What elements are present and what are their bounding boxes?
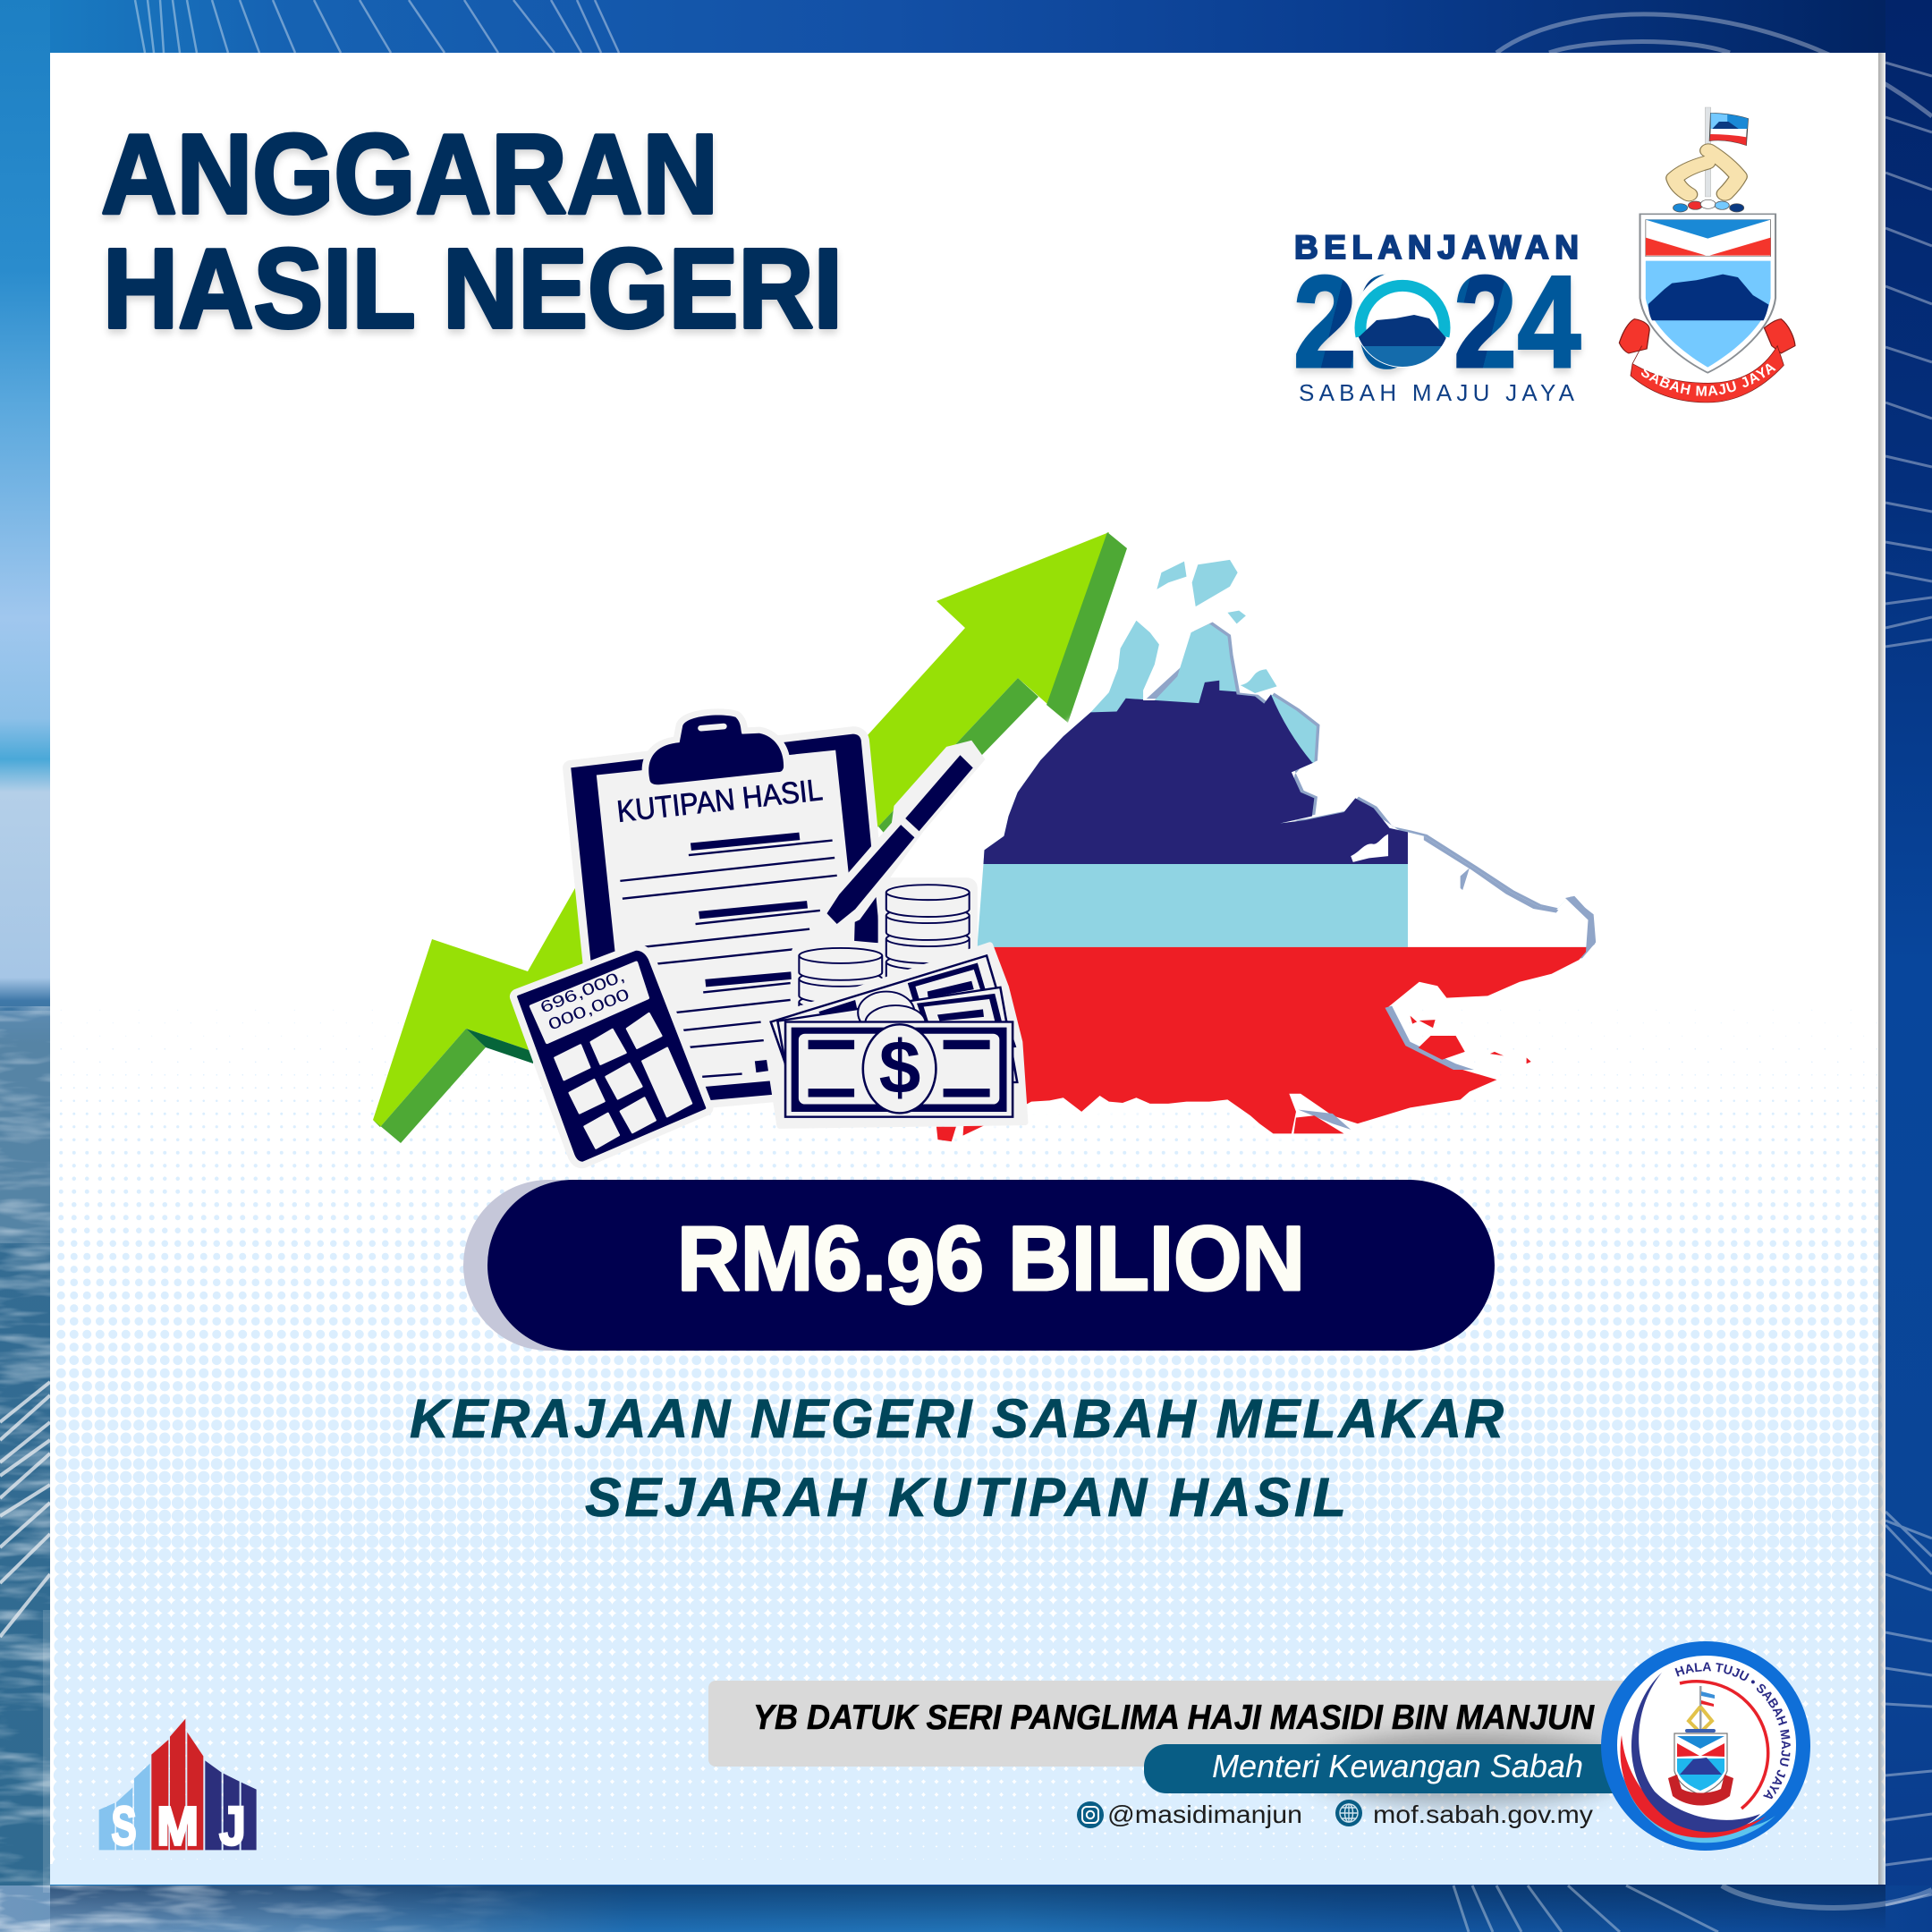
crest: Sabah coat of arms: [1619, 107, 1796, 402]
social links: [1077, 1800, 1593, 1828]
badge ring: [1601, 1641, 1810, 1851]
calculator display: 696,000,: [538, 967, 627, 1017]
subtitle: KERAJAAN NEGERI SABAH MELAKAR: [410, 1388, 1504, 1449]
clipboard: [571, 716, 887, 1110]
map north-east island: [1351, 835, 1388, 862]
logo: SMJ: [99, 1719, 257, 1858]
clipboard clip: [648, 716, 784, 784]
illustration: clipboard, pen, coins, calculator, money: [519, 716, 1025, 1160]
money dollar sign: $: [879, 1025, 920, 1109]
pen: [818, 741, 986, 930]
arrow head side: [1046, 532, 1127, 723]
website: mof.sabah.gov.my: [1373, 1801, 1593, 1828]
title: ANGGARAN: [101, 111, 718, 237]
map flag bands: [962, 621, 1589, 1136]
map northern islands: [1157, 560, 1277, 693]
arrow tail shade: [466, 1029, 534, 1063]
panel edge shading: [1878, 53, 1885, 1885]
clipboard written lines: [620, 836, 837, 1077]
subtitle: [410, 1388, 1504, 1528]
map southern island: [1293, 1115, 1344, 1133]
badge motto: HALA TUJU • SABAH MAJU JAYA: [1674, 1662, 1791, 1800]
minister role bar: [1144, 1733, 1637, 1805]
calculator display: 000,000: [546, 985, 632, 1034]
SMJ columns: [99, 1719, 257, 1850]
badge swoosh: [1621, 1673, 1775, 1843]
arrow lime body: [373, 532, 1109, 1127]
calculator display: [538, 967, 632, 1034]
money notes: [764, 945, 1025, 1126]
SMJ letters: [111, 1796, 246, 1858]
subtitle: SEJARAH KUTIPAN HASIL: [585, 1467, 1346, 1528]
coin stacks: [792, 877, 978, 1027]
halftone dots background: [50, 1010, 1887, 1885]
illustration: growth arrow: [373, 532, 1127, 1143]
calculator keys: [555, 1013, 691, 1148]
logo: Belanjawan 2024: [1293, 229, 1580, 406]
pill value: 9: [886, 1221, 935, 1323]
title: HASIL NEGERI: [103, 225, 843, 352]
badge inner arc: [1680, 1682, 1768, 1809]
SMJ letters: J: [219, 1796, 246, 1858]
shield: [1640, 214, 1775, 373]
value pill: [463, 1180, 1495, 1351]
arrow shaft side: [878, 678, 1038, 845]
crown gems: [1674, 199, 1744, 212]
logo tagline: SABAH MAJU JAYA: [1299, 379, 1575, 406]
map coast shadow: [1147, 623, 1596, 958]
minister name: YB DATUK SERI PANGLIMA HAJI MASIDI BIN MANJUN: [753, 1699, 1595, 1737]
ribbon scrolls: [1619, 319, 1795, 353]
icon: globe: [1335, 1800, 1362, 1826]
SMJ letters: S: [111, 1796, 137, 1858]
arms holding pole: [1674, 150, 1739, 194]
pill body: [487, 1180, 1495, 1351]
logo heading: BELANJAWAN: [1294, 229, 1579, 266]
ribbon: [1631, 346, 1784, 402]
badge: Hala Tuju: [1601, 1641, 1810, 1851]
pill shadow: [463, 1180, 1447, 1351]
pill value: 6 BILION: [935, 1208, 1305, 1309]
title: [101, 111, 843, 352]
clipboard heading: KUTIPAN HASIL: [615, 773, 825, 829]
badge small crest: [1668, 1686, 1733, 1805]
logo year: 2024: [1293, 249, 1580, 394]
minister role: Menteri Kewangan Sabah: [1212, 1748, 1583, 1784]
minister name bar: [708, 1681, 1639, 1767]
map coast details: [1299, 836, 1595, 1130]
calculator body: [519, 952, 705, 1160]
map of Sabah in flag colours: [936, 560, 1596, 1141]
pill value: RM6.: [677, 1208, 895, 1309]
instagram handle: @masidimanjun: [1107, 1801, 1302, 1828]
arrow tail side: [373, 1029, 486, 1143]
map south-east islets: [936, 1016, 1531, 1141]
ribbon motto: SABAH MAJU JAYA: [1641, 363, 1776, 396]
flag pole and flag: [1705, 107, 1748, 197]
logo zero with mountain: [1354, 271, 1451, 373]
SMJ letters: M: [157, 1796, 199, 1858]
icon: instagram: [1077, 1801, 1104, 1828]
